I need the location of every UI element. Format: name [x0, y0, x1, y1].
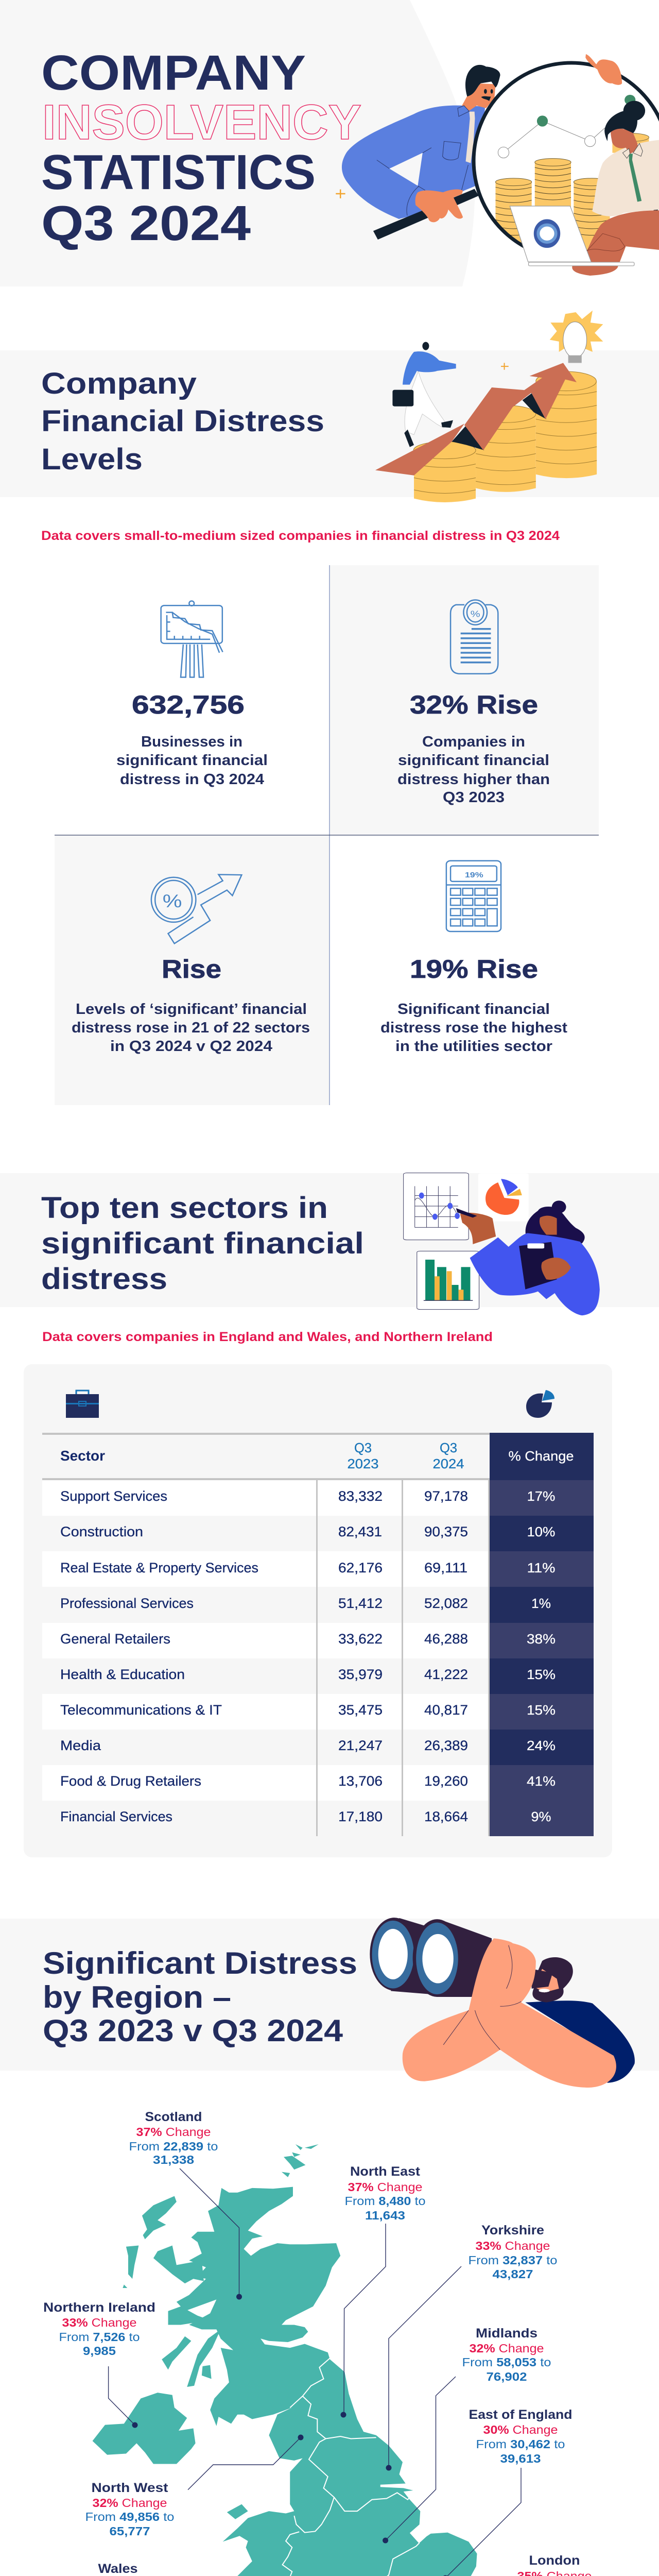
- stat: 32% rise: Q3 2023: [443, 789, 505, 806]
- stat: rise in sectors: Levels of ‘significant’ financial: [76, 1001, 307, 1018]
- UK region map: [43, 2110, 602, 2576]
- table rows: Financial Services: [60, 1809, 172, 1824]
- table rows: 90,375: [424, 1524, 468, 1539]
- table rows: 82,431: [338, 1524, 382, 1539]
- map shape: [93, 2144, 477, 2576]
- heading: [43, 1946, 357, 2048]
- region: London: [403, 2553, 602, 2576]
- stat: rise in sectors: distress rose in 21 of 22 sectors: [72, 1020, 310, 1036]
- climbing man: [405, 371, 453, 435]
- heading: Company: [41, 367, 197, 400]
- section band: company financial distress levels: [0, 311, 659, 502]
- table rows: Construction: [60, 1524, 143, 1539]
- region: North West: From 49,856 to: [85, 2510, 174, 2523]
- region: North East: 37% Change: [348, 2180, 422, 2194]
- laptop: [510, 206, 591, 262]
- table rows: 40,817: [424, 1702, 468, 1718]
- table rows: Media: [60, 1738, 101, 1753]
- table rows: Sector: [60, 1448, 105, 1464]
- stat: 19% rise: in the utilities sector: [395, 1038, 552, 1055]
- heading: significant financial: [41, 1227, 364, 1260]
- stat: 632,756: Businesses in: [141, 734, 242, 750]
- plus sparkle: [336, 190, 345, 198]
- table rows: [42, 1433, 594, 1836]
- table rows: Food & Drug Retailers: [60, 1773, 201, 1789]
- region: North East: From 8,480 to: [345, 2194, 425, 2208]
- data note: Data covers companies in England and Wales, and Northern Ireland: [42, 1330, 493, 1344]
- table rows: 52,082: [424, 1596, 468, 1611]
- table rows: 18,664: [424, 1809, 468, 1824]
- table rows: 83,332: [338, 1488, 383, 1504]
- region: Midlands: 76,902: [486, 2370, 527, 2383]
- table rows: 15%: [527, 1702, 556, 1718]
- woman: [592, 140, 659, 216]
- region: East of England: [443, 2408, 573, 2576]
- region: Scotland: From 22,839 to: [129, 2140, 218, 2153]
- table rows: Real Estate & Property Services: [60, 1560, 258, 1575]
- title: STATISTICS: [41, 145, 316, 200]
- magnifier lens: [474, 63, 659, 259]
- region: Yorkshire: 33% Change: [476, 2239, 550, 2252]
- table rows: 35,979: [338, 1667, 383, 1682]
- region: London: London: [529, 2553, 580, 2568]
- heading: [41, 1191, 364, 1296]
- stat: rise in sectors: in Q3 2024 v Q2 2024: [110, 1038, 272, 1055]
- stat: 632,756: distress in Q3 2024: [120, 771, 264, 788]
- table rows: 69,111: [424, 1560, 467, 1575]
- heading: [41, 367, 324, 476]
- table rows: 2023: [347, 1456, 379, 1471]
- table rows: 17,180: [338, 1809, 383, 1824]
- stat: 32% rise: 32% Rise: [410, 690, 538, 719]
- stat: 19% rise: 19% Rise: [410, 955, 538, 984]
- region: Midlands: From 58,053 to: [462, 2355, 551, 2369]
- icon: percent document: %: [471, 609, 480, 619]
- table rows: 24%: [527, 1738, 556, 1753]
- region: North West: North West: [92, 2481, 168, 2495]
- illustration: man climbing arrow over coin stacks: [375, 311, 603, 502]
- icon: chart board: [161, 601, 223, 677]
- table rows: 19,260: [424, 1773, 468, 1789]
- woman figure: [552, 1200, 566, 1213]
- heading: Financial Distress: [41, 404, 324, 438]
- title: [41, 45, 361, 251]
- stat: 19% rise: Significant financial: [397, 1001, 550, 1018]
- table rows: 1%: [531, 1596, 551, 1611]
- table rows: 38%: [527, 1631, 556, 1647]
- region: East of England: East of England: [469, 2408, 573, 2422]
- table rows: Professional Services: [60, 1596, 194, 1611]
- stat: rise in sectors: [72, 875, 310, 1055]
- region: North West: 32% Change: [93, 2496, 167, 2510]
- table rows: 2024: [432, 1456, 464, 1471]
- region: Yorkshire: [386, 2223, 557, 2471]
- region: North East: North East: [350, 2164, 421, 2179]
- table rows: 41,222: [424, 1667, 468, 1682]
- heading: distress: [41, 1262, 167, 1296]
- heading: by Region –: [43, 1980, 231, 2014]
- region: Northern Ireland: From 7,526 to: [59, 2330, 140, 2344]
- region: Northern Ireland: [43, 2300, 155, 2428]
- table rows: 46,288: [424, 1631, 468, 1647]
- table rows: % Change: [509, 1448, 574, 1464]
- region: Northern Ireland: Northern Ireland: [43, 2300, 155, 2315]
- table rows: Health & Education: [60, 1667, 185, 1682]
- icon: pie chart: [526, 1390, 554, 1418]
- table rows: 11%: [527, 1560, 555, 1575]
- region: Yorkshire: Yorkshire: [481, 2223, 544, 2238]
- icon: percent coin and arrow: %: [163, 892, 182, 911]
- heading: Q3 2023 v Q3 2024: [43, 2013, 343, 2048]
- region: Northern Ireland: 33% Change: [62, 2316, 137, 2329]
- stat: 19% rise: distress rose the highest: [380, 1020, 567, 1036]
- stat: 32% rise: significant financial: [398, 752, 549, 769]
- section band: top ten sectors: [0, 1173, 659, 1315]
- region: East of England: From 30,462 to: [476, 2437, 565, 2451]
- title: INSOLVENCY: [42, 95, 361, 150]
- region: Scotland: 31,338: [153, 2153, 194, 2166]
- region: Scotland: Scotland: [145, 2110, 202, 2124]
- table rows: Support Services: [60, 1488, 167, 1504]
- icon: percent coin and arrow: [151, 875, 241, 943]
- region: Midlands: Midlands: [476, 2326, 537, 2341]
- title: COMPANY: [41, 45, 306, 100]
- table rows: 10%: [527, 1524, 555, 1539]
- region: Midlands: 32% Change: [470, 2342, 544, 2355]
- stat: 32% rise: distress higher than: [397, 771, 550, 788]
- region: North East: 11,643: [365, 2209, 405, 2222]
- hero panel: [42, 54, 659, 276]
- region: Yorkshire: 43,827: [492, 2267, 533, 2281]
- stat: 19% rise: [380, 861, 567, 1055]
- table rows: General Retailers: [60, 1631, 170, 1647]
- region: North West: 65,777: [109, 2524, 150, 2538]
- table rows: 15%: [527, 1667, 556, 1682]
- illustration: man with binoculars: [370, 1918, 635, 2088]
- region: Wales: Wales: [98, 2562, 138, 2576]
- icon: calculator: [446, 861, 501, 931]
- section band: significant distress by region: [0, 1918, 659, 2088]
- region: Scotland: 37% Change: [136, 2125, 211, 2139]
- region: Yorkshire: From 32,837 to: [469, 2253, 557, 2267]
- table rows: Telecommunications & IT: [60, 1702, 222, 1718]
- table rows: Q3: [440, 1440, 457, 1455]
- table rows: 51,412: [338, 1596, 383, 1611]
- table panel: [24, 1364, 612, 1857]
- stat: 632,756: significant financial: [116, 752, 268, 769]
- heading: Top ten sectors in: [41, 1191, 328, 1225]
- stat grid panel: [55, 565, 599, 1105]
- table rows: 33,622: [338, 1631, 383, 1647]
- region: Scotland: [129, 2110, 242, 2300]
- icon: percent document: [450, 600, 498, 674]
- table rows: 9%: [531, 1809, 551, 1824]
- heading: Levels: [41, 443, 143, 476]
- stat: 632,756: 632,756: [132, 690, 245, 719]
- stat: 632,756: [116, 601, 268, 788]
- table rows: 35,475: [338, 1702, 383, 1718]
- stat: rise in sectors: Rise: [162, 955, 221, 984]
- region: East of England: 39,613: [500, 2452, 541, 2465]
- table rows: 62,176: [338, 1560, 383, 1575]
- region: North East: [341, 2164, 425, 2417]
- table rows: Q3: [354, 1440, 372, 1455]
- table rows: 97,178: [424, 1488, 468, 1504]
- icon: calculator: 19%: [465, 871, 483, 879]
- table rows: 17%: [527, 1488, 555, 1504]
- light bulb: [550, 311, 603, 355]
- region: Northern Ireland: 9,985: [83, 2344, 116, 2358]
- illustration: woman presenting charts: [404, 1173, 600, 1315]
- table rows: 26,389: [424, 1738, 468, 1753]
- region: Midlands: [383, 2326, 551, 2543]
- table rows: 21,247: [338, 1738, 383, 1753]
- stat: 32% rise: Companies in: [422, 734, 525, 750]
- title: Q3 2024: [41, 196, 251, 251]
- heading: Significant Distress: [43, 1946, 357, 1980]
- data note: Data covers small-to-medium sized companies in financial distress in Q3 2024: [41, 529, 560, 543]
- illustration: magnifying glass with man, woman and coins: [336, 54, 659, 276]
- table rows: 13,706: [338, 1773, 383, 1789]
- stat: 32% rise: [397, 600, 550, 806]
- icon: briefcase: [66, 1391, 99, 1418]
- region: East of England: 30% Change: [483, 2423, 558, 2436]
- region: North West: [85, 2435, 304, 2538]
- table rows: 41%: [527, 1773, 556, 1789]
